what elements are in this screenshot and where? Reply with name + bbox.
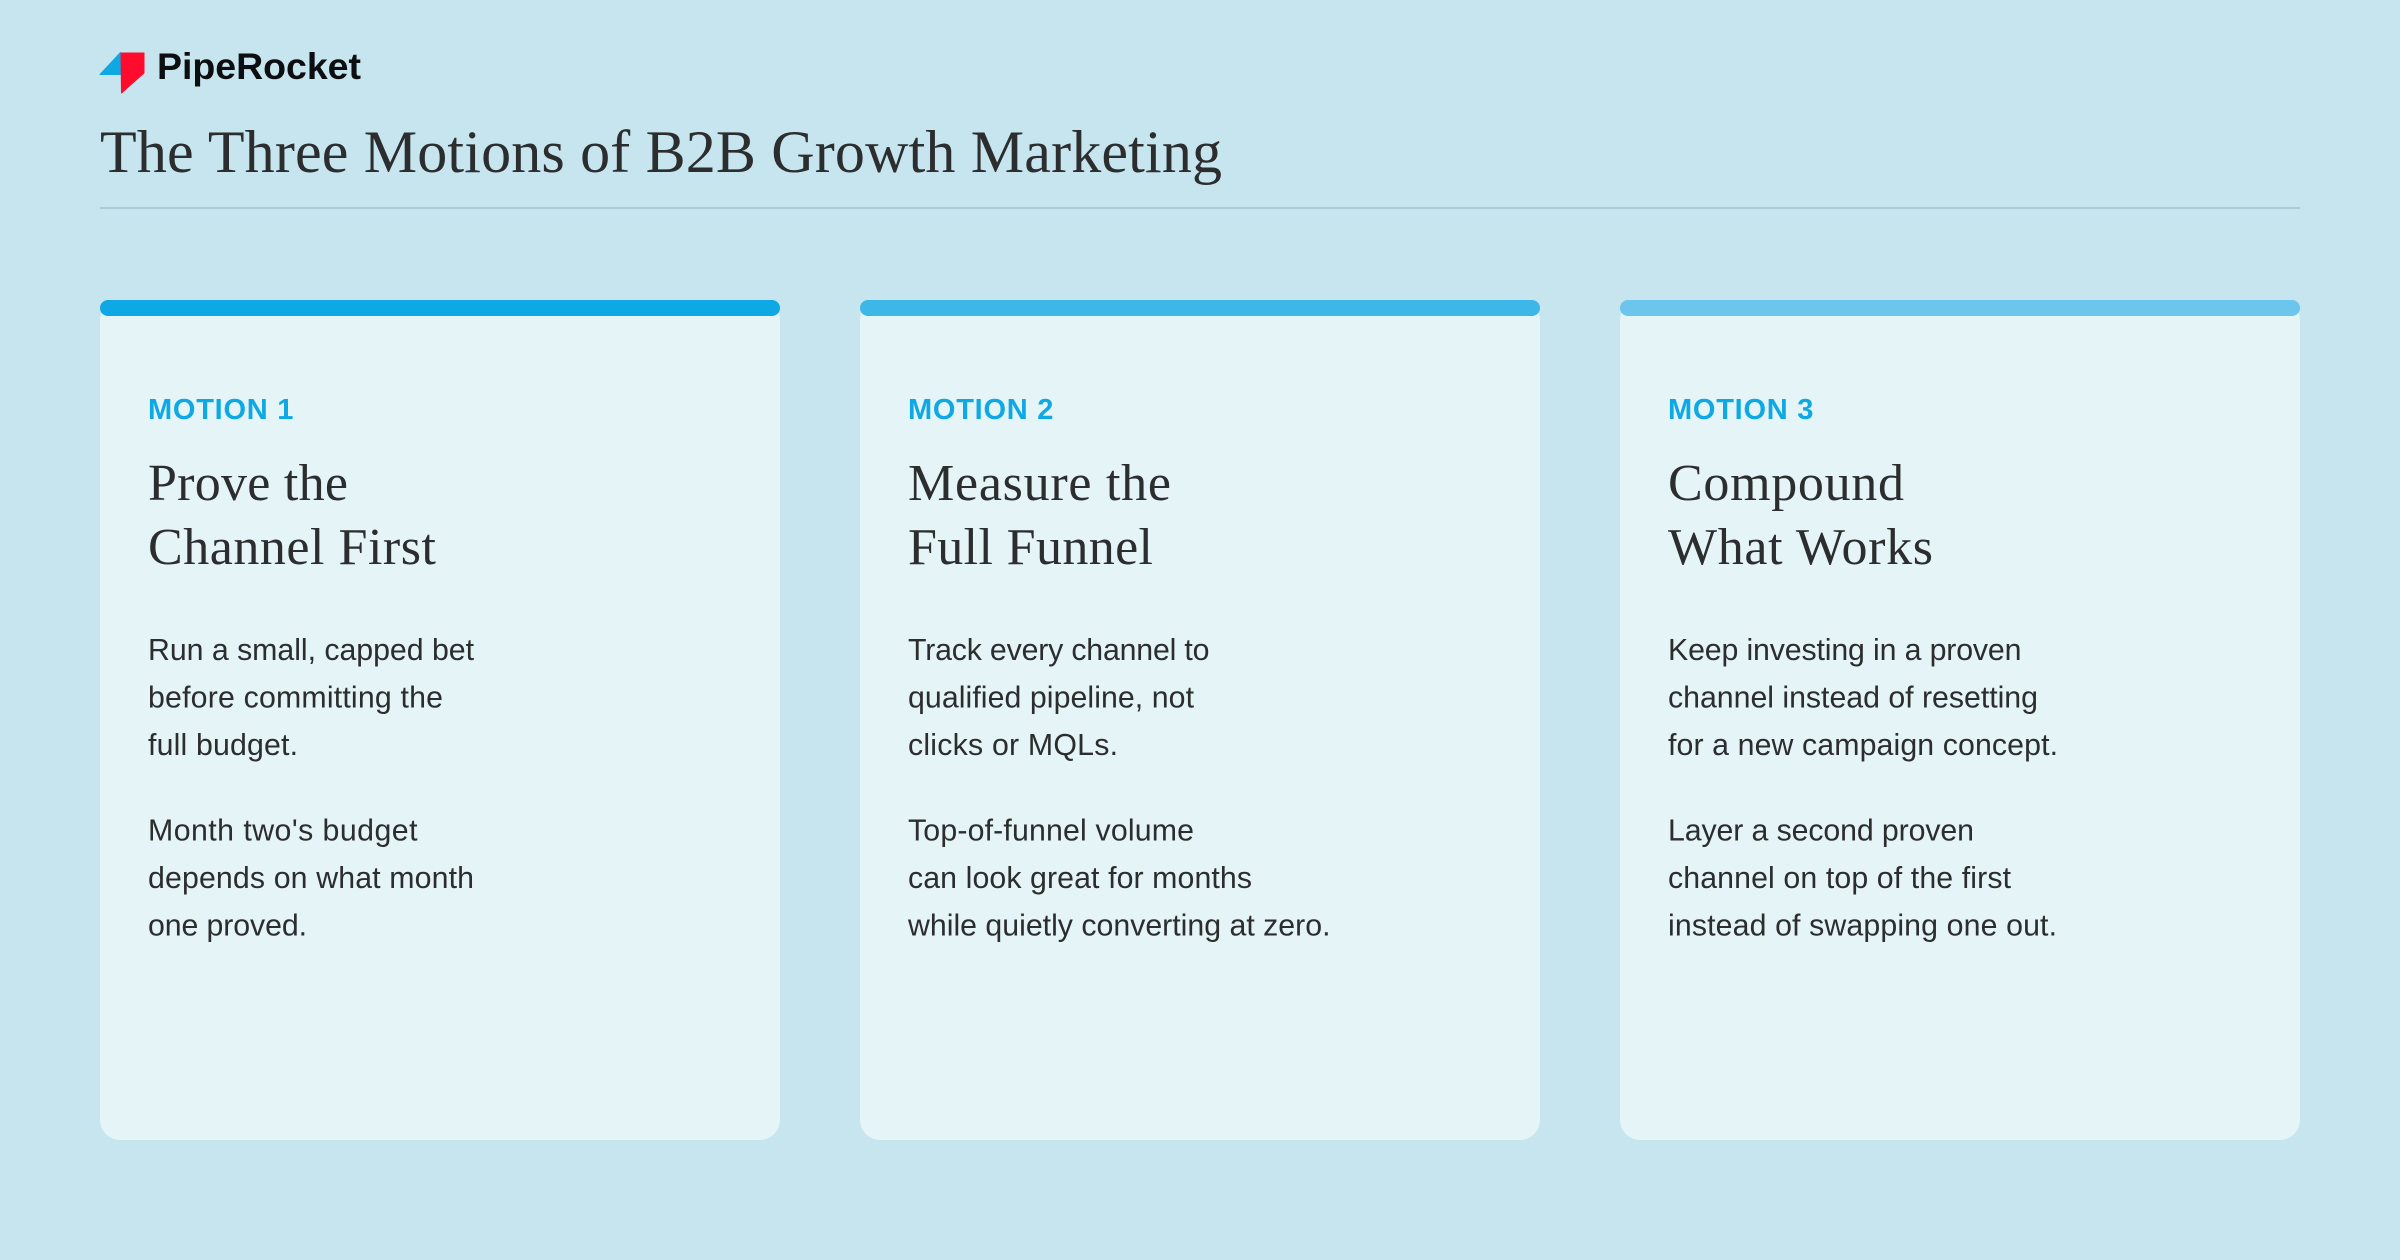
body text: motion 1 second paragraph: [148, 814, 474, 942]
body text: motion 2 second paragraph: Top-of-funnel volume: [908, 814, 1194, 848]
heading: prove the channel first: Channel First: [148, 519, 437, 576]
body text: motion 3 first paragraph: [1668, 634, 2058, 762]
panel: motion 1: [100, 300, 780, 1140]
body text: motion 1 second paragraph: Month two's budget: [148, 814, 418, 848]
body text: motion 1 first paragraph: [148, 634, 475, 762]
body text: motion 1 second paragraph: one proved.: [148, 910, 307, 942]
body text: motion 3 second paragraph: instead of swapping one out.: [1668, 910, 2057, 942]
body text: motion 3 first paragraph: Keep investing in a proven: [1668, 634, 2022, 667]
logo wordmark: PipeRocket: [157, 45, 362, 87]
accent bar 1: [100, 300, 780, 316]
logo: PipeRocket: [100, 45, 362, 93]
accent bar 3: [1620, 300, 2300, 316]
body text: motion 2 second paragraph: [907, 814, 1330, 942]
body text: motion 3 first paragraph: for a new campaign concept.: [1668, 729, 2058, 762]
body text: motion 2 first paragraph: clicks or MQLs.: [908, 729, 1118, 762]
body text: motion 3 second paragraph: [1668, 814, 2057, 942]
icon: logo mark: [100, 52, 144, 93]
panel: motion 3: [1620, 300, 2300, 1140]
body text: motion 2 second paragraph: can look great for months: [908, 862, 1252, 895]
label: motion 2: MOTION 2: [908, 394, 1054, 426]
title: The Three Motions of B2B Growth Marketing: [100, 119, 1222, 185]
heading: compound what works: What Works: [1668, 519, 1933, 576]
body text: motion 1 first paragraph: before committing the: [148, 682, 443, 714]
label: motion 1: MOTION 1: [148, 394, 294, 426]
body text: motion 1 first paragraph: Run a small, capped bet: [148, 634, 475, 667]
body text: motion 2 second paragraph: while quietly converting at zero.: [907, 910, 1330, 942]
accent bar 2: [860, 300, 1540, 316]
body text: motion 2 first paragraph: qualified pipeline, not: [908, 682, 1195, 714]
body text: motion 3 first paragraph: channel instead of resetting: [1668, 682, 2038, 714]
heading: compound what works: [1668, 455, 1933, 576]
body text: motion 1 first paragraph: full budget.: [148, 729, 298, 762]
body text: motion 1 second paragraph: depends on what month: [148, 862, 474, 895]
heading: prove the channel first: Prove the: [148, 455, 348, 512]
heading: measure the full funnel: Measure the: [908, 455, 1171, 512]
body text: motion 2 first paragraph: Track every channel to: [908, 634, 1210, 667]
body text: motion 2 first paragraph: [908, 634, 1210, 762]
heading: measure the full funnel: Full Funnel: [908, 519, 1153, 576]
heading: prove the channel first: [148, 455, 437, 576]
body text: motion 3 second paragraph: Layer a second proven: [1668, 814, 1974, 848]
label: motion 3: MOTION 3: [1668, 394, 1814, 426]
body text: motion 3 second paragraph: channel on top of the first: [1668, 862, 2012, 895]
panel: motion 2: [860, 300, 1540, 1140]
heading: measure the full funnel: [908, 455, 1171, 576]
heading: compound what works: Compound: [1668, 455, 1904, 512]
